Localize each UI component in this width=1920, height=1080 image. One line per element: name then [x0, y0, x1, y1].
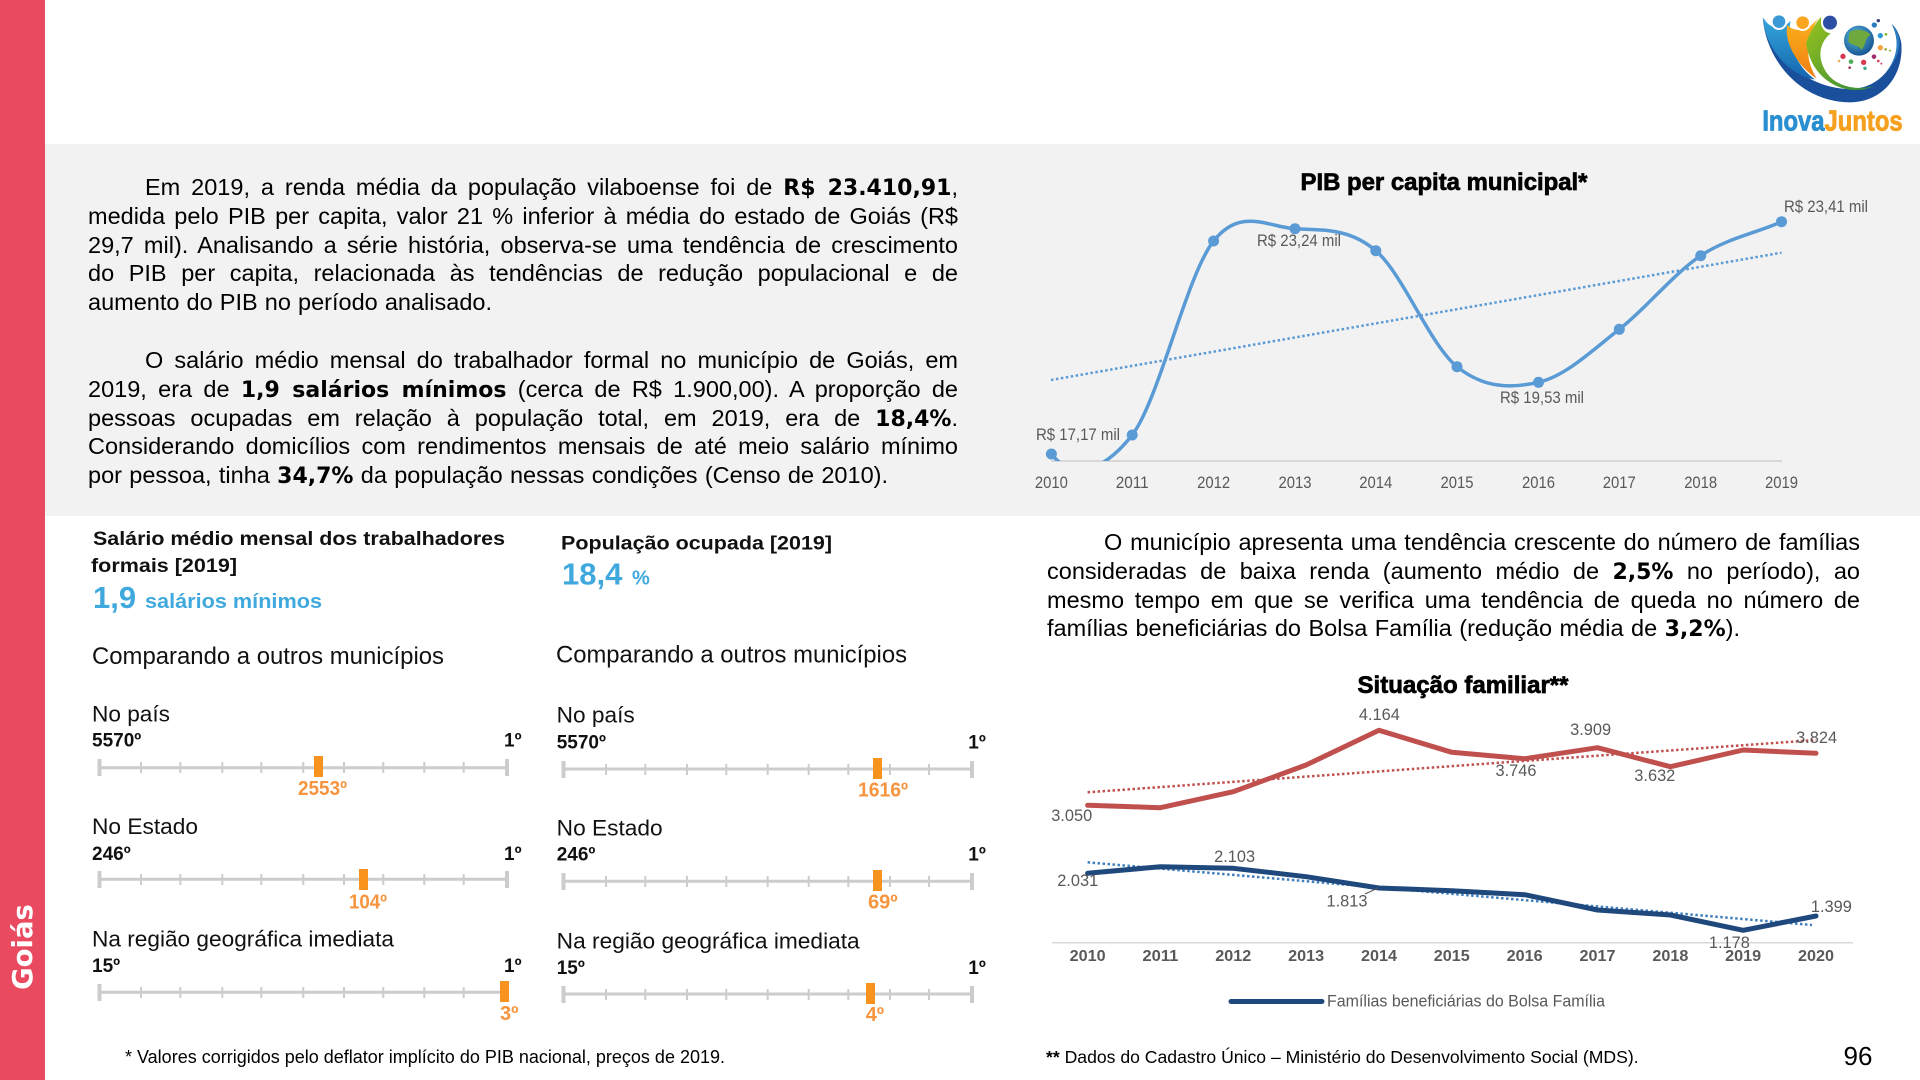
stat: salário médio mensal	[91, 529, 505, 615]
blue trend line	[1088, 862, 1812, 925]
x axis labels: 2014	[1359, 474, 1392, 492]
logo dots	[1838, 19, 1891, 70]
sidebar: Goiás	[0, 0, 45, 1080]
chart: PIB per capita municipal	[1035, 169, 1868, 492]
x axis labels: 2016	[1507, 948, 1543, 965]
stat: salário médio mensal: Salário médio mensal dos trabalhadores	[93, 529, 505, 550]
rank scale: salário na região: 3º	[500, 1003, 518, 1025]
data labels: 1.813	[1326, 892, 1368, 910]
rank scale: população no estado: 1º	[968, 845, 986, 866]
rank scale: população no país	[557, 702, 986, 802]
text block: renda média	[88, 174, 958, 315]
footnote: Cadastro Único: ** Dados do Cadastro Único – Ministério do Desenvolvimento Social (MDS).	[1046, 1047, 1639, 1067]
data labels: R$ 17,17 mil	[1036, 426, 1120, 444]
rank scale: população no país: No país	[557, 702, 635, 727]
rank scale: salário no estado	[92, 814, 522, 913]
x axis labels: 2019	[1725, 948, 1761, 965]
rank scale: salário no estado: 246º	[92, 844, 131, 865]
data labels: 4.164	[1359, 706, 1400, 724]
rank scale: população no estado: 246º	[557, 845, 595, 866]
rank scale: salário na região: Na região geográfica imediata	[92, 927, 395, 952]
x axis labels: 2013	[1278, 474, 1312, 492]
chart title: Situação familiar**	[1358, 672, 1569, 699]
logo figure: orange	[1787, 17, 1819, 78]
text block: salário médio: por pessoa, tinha 34,7% da população nessas condições (Censo de 2010).	[88, 462, 888, 489]
line: baixa renda	[1088, 730, 1816, 808]
x axis labels: 2018	[1684, 474, 1717, 492]
rank scale: salário no estado: 1º	[504, 844, 522, 865]
footnote: PIB deflator: * Valores corrigidos pelo deflator implícito do PIB nacional, preços de 2019.	[125, 1047, 725, 1067]
text block: renda média: Em 2019, a renda média da população vilaboense foi de R$ 23.410,91,	[145, 174, 958, 201]
rank scale: salário na região: 15º	[92, 956, 120, 977]
text block: famílias de baixa renda: mesmo tempo em que se verifica uma tendência de queda no número de	[1047, 587, 1860, 613]
data labels	[1036, 198, 1868, 444]
data markers	[1046, 216, 1787, 460]
rank scale: população na região: 1º	[968, 958, 986, 979]
text block: salário médio	[88, 347, 958, 489]
x axis labels: 2017	[1603, 474, 1636, 492]
x axis labels	[1070, 948, 1834, 965]
heading: comparando direita: Comparando a outros municípios	[556, 642, 907, 669]
x axis labels: 2011	[1142, 948, 1178, 965]
data labels: 2.031	[1057, 872, 1098, 890]
logo globe	[1844, 26, 1874, 56]
text block: salário médio: pessoas ocupadas em relação à população total, em 2019, era de 18,4%.	[88, 405, 958, 432]
rank scale: salário no país: 2553º	[298, 778, 347, 800]
x axis labels: 2016	[1522, 474, 1555, 492]
stat: população ocupada	[561, 533, 832, 591]
rank scale: salário no país	[92, 702, 522, 800]
rank scale: salário no país: No país	[92, 702, 170, 727]
x axis labels: 2012	[1197, 474, 1230, 492]
data labels: 3.050	[1051, 807, 1092, 825]
text block: renda média: 29,7 mil). Analisando a série história, observa-se uma tendência de crescimento	[88, 232, 958, 258]
logo figure: blue	[1763, 17, 1815, 79]
x axis labels: 2010	[1070, 948, 1106, 965]
x axis labels	[1035, 474, 1798, 492]
trend line	[1051, 253, 1782, 380]
x axis labels: 2010	[1035, 474, 1068, 492]
leader line	[1365, 888, 1378, 894]
rank scale: salário na região: 1º	[504, 956, 522, 977]
rank scale: população na região: Na região geográfica imediata	[557, 928, 860, 953]
axis line	[1051, 460, 1782, 462]
x axis labels: 2018	[1652, 948, 1689, 965]
chart: Situação familiar	[1051, 672, 1853, 1010]
data labels: R$ 23,24 mil	[1257, 232, 1341, 250]
x axis labels: 2020	[1798, 948, 1834, 965]
rank scale: população no país: 5570º	[557, 732, 606, 753]
stat: população ocupada: %	[632, 567, 650, 589]
stat: salário médio mensal: formais [2019]	[91, 556, 237, 577]
heading: comparando esquerda: Comparando a outros municípios	[92, 643, 444, 670]
text block: salário médio: O salário médio mensal do trabalhador formal no município de Goiás, em	[145, 347, 958, 373]
rank scale: população no estado	[557, 816, 986, 913]
x axis labels: 2013	[1288, 948, 1324, 965]
line: Bolsa Família	[1088, 867, 1816, 930]
text block: famílias de baixa renda: famílias beneficiárias do Bolsa Família (redução média de 3,2%).	[1047, 615, 1740, 642]
data labels: 1.399	[1811, 898, 1852, 916]
chart title: PIB per capita municipal*	[1300, 169, 1588, 196]
logo heads	[1772, 14, 1838, 31]
x axis labels: 2015	[1440, 474, 1474, 492]
text block: salário médio: Considerando domicílios com rendimentos mensais de até meio salário mínimo	[88, 433, 958, 459]
text block: renda média: aumento do PIB no período analisado.	[88, 289, 492, 315]
x axis labels: 2015	[1434, 948, 1470, 965]
logo swoosh	[1763, 17, 1902, 102]
text block: renda média: do PIB per capita, relacionada às tendências de redução populacional e de	[88, 260, 958, 286]
red trend line	[1088, 740, 1816, 792]
x axis labels: 2017	[1580, 948, 1616, 965]
page number: 96	[1844, 1041, 1872, 1071]
stat: população ocupada: 18,4	[562, 556, 623, 591]
data labels: 3.909	[1570, 721, 1611, 739]
legend: Famílias beneficiárias do Bolsa Família	[1327, 992, 1606, 1010]
stat: salário médio mensal: 1,9	[93, 580, 136, 615]
x axis labels: 2014	[1361, 948, 1397, 965]
logo right swoosh	[1875, 24, 1899, 83]
rank scale: população na região	[557, 928, 986, 1026]
text block: famílias de baixa renda: consideradas de baixa renda (aumento médio de 2,5% no período), ao	[1047, 558, 1860, 585]
stat: população ocupada: População ocupada [2019]	[561, 533, 832, 554]
rank scale: salário no país: 1º	[504, 731, 522, 752]
PIB line	[1051, 221, 1782, 470]
logo wordmark: InovaJuntos	[1762, 105, 1903, 137]
data labels: 2.103	[1214, 848, 1255, 866]
panel: grey background	[45, 144, 1920, 516]
rank scale: população no país: 1616º	[858, 780, 908, 802]
text block: famílias de baixa renda: O município apresenta uma tendência crescente do número de famílias	[1104, 529, 1860, 555]
axis line	[1052, 942, 1853, 944]
rank scale: salário na região	[92, 927, 522, 1025]
stat: salário médio mensal: salários mínimos	[145, 591, 322, 613]
data labels: 1.178	[1709, 934, 1750, 952]
rank scale: população no país: 1º	[968, 732, 986, 753]
rank scale: população na região: 15º	[557, 958, 585, 979]
rank scale: salário no estado: No Estado	[92, 814, 198, 839]
data labels: 3.746	[1496, 762, 1536, 780]
x axis labels: 2019	[1765, 474, 1798, 492]
x axis labels: 2012	[1215, 948, 1251, 965]
text block: renda média: medida pelo PIB per capita, valor 21 % inferior à média do estado de Goiás (R$	[88, 203, 958, 229]
logo: Inova Juntos	[1762, 14, 1903, 137]
text block: salário médio: 2019, era de 1,9 salários mínimos (cerca de R$ 1.900,00). A proporção de	[88, 376, 958, 403]
data labels: R$ 19,53 mil	[1500, 389, 1584, 407]
x axis labels: 2011	[1116, 474, 1149, 492]
data labels	[1051, 706, 1852, 952]
logo figure: green	[1806, 17, 1874, 90]
rank scale: população no estado: 69º	[868, 891, 898, 913]
data labels: 3.824	[1796, 729, 1837, 747]
data labels: 3.632	[1634, 767, 1675, 785]
rank scale: salário no estado: 104º	[349, 891, 387, 913]
data labels: R$ 23,41 mil	[1784, 198, 1868, 216]
rank scale: população na região: 4º	[866, 1004, 884, 1026]
sidebar label: Goiás	[7, 904, 39, 990]
rank scale: população no estado: No Estado	[557, 816, 663, 841]
text block: famílias de baixa renda	[1047, 529, 1860, 642]
rank scale: salário no país: 5570º	[92, 731, 141, 752]
